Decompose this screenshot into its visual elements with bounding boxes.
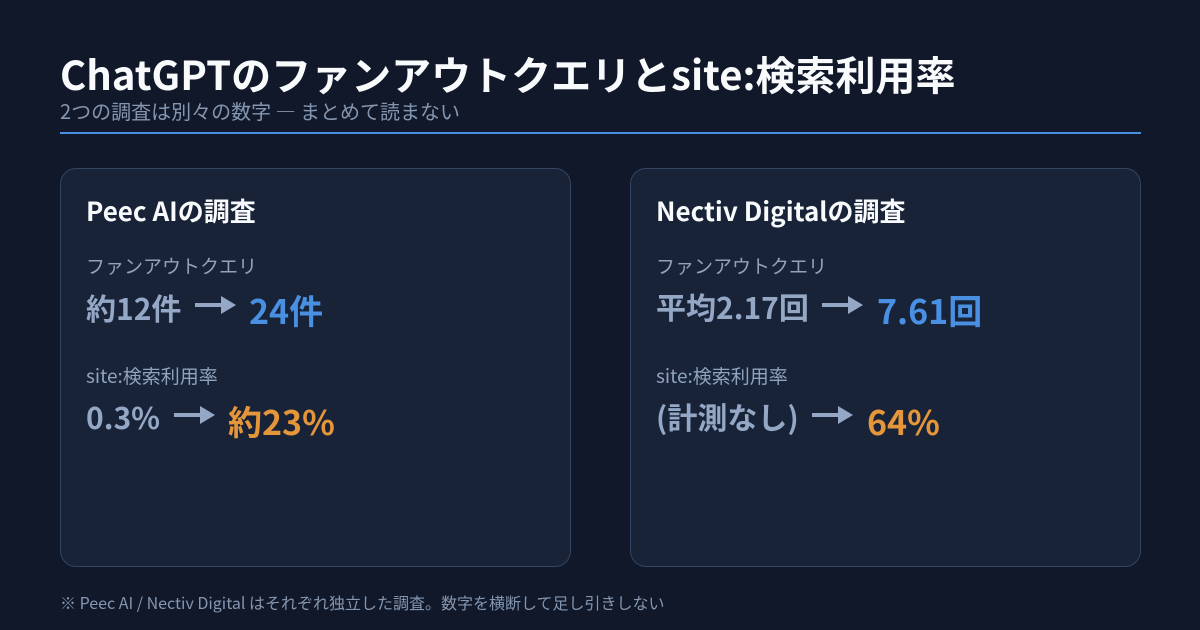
heading: Peec AI: Peec AIの調査 [86,192,256,229]
label: site search, Peec AI: site:検索利用率 [86,362,218,388]
subtitle: 2つの調査は別々の数字 — まとめて読まない [60,96,460,125]
value: before, fan-out, Nectiv: 平均2.17回 [656,284,809,328]
value: before, fan-out, Peec AI: 約12件 [86,285,181,329]
value: after, fan-out, Nectiv: 7.61回 [877,285,982,334]
label: fan-out, Nectiv: ファンアウトクエリ [656,252,827,278]
heading: Nectiv Digital: Nectiv Digitalの調査 [656,192,906,229]
arrow: site search, Peec AI [174,406,215,424]
value: before, site search, Nectiv: (計測なし) [656,394,799,438]
value: after, fan-out, Peec AI: 24件 [249,285,323,334]
panel: Peec AI [60,168,571,567]
panel: Nectiv Digital [630,168,1141,567]
arrow: fan-out, Peec AI [195,296,236,314]
value: after, site search, Peec AI: 約23% [228,396,335,445]
label: site search, Nectiv: site:検索利用率 [656,362,788,388]
value: before, site search, Peec AI: 0.3% [86,394,160,438]
value: after, site search, Nectiv: 64% [867,396,940,445]
title: ChatGPTのファンアウトクエリとsite:検索利用率 [60,44,955,102]
arrow: site search, Nectiv [812,406,853,424]
footnote: ※ Peec AI / Nectiv Digital はそれぞれ独立した調査。数字を横断して足し引きしない [60,590,665,614]
title rule [60,132,1141,134]
label: fan-out, Peec AI: ファンアウトクエリ [86,252,257,278]
arrow: fan-out, Nectiv [822,296,863,314]
